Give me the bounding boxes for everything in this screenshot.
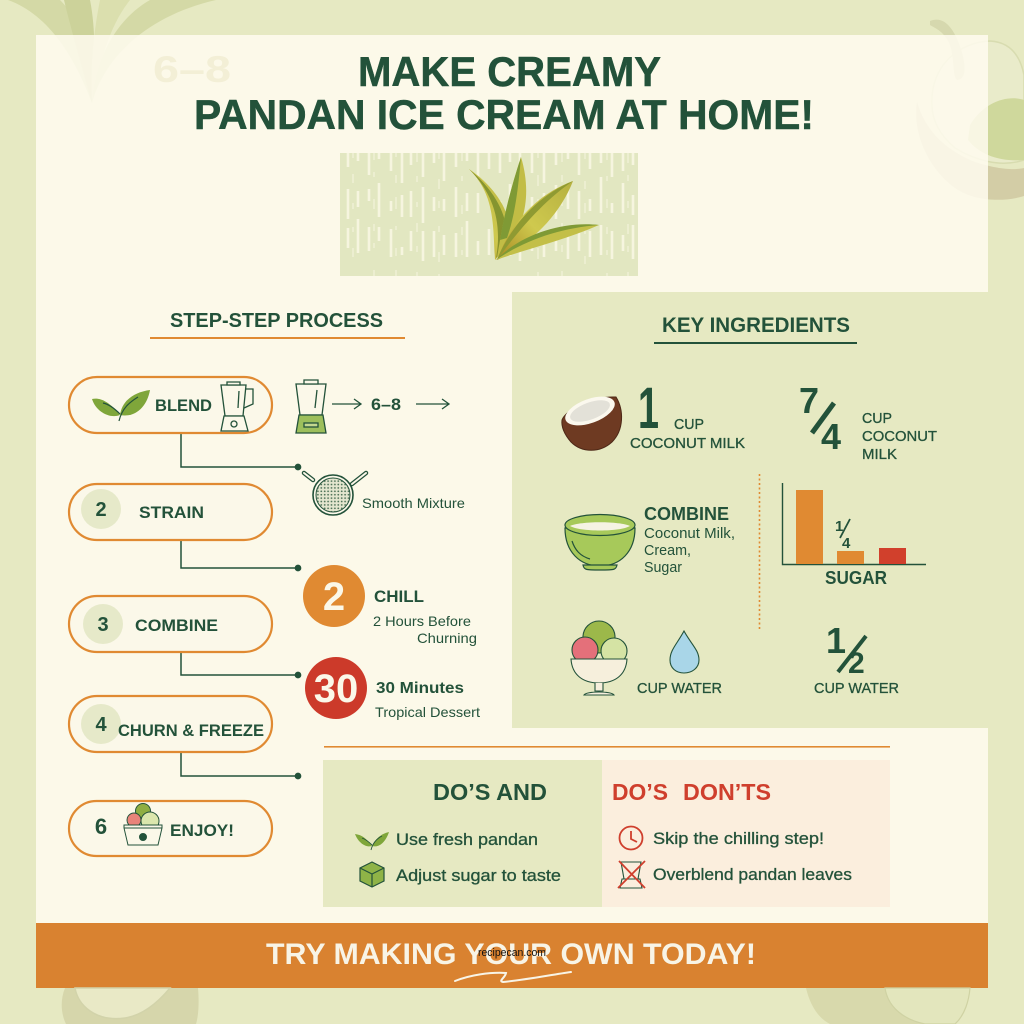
icon: green bowl bbox=[565, 514, 635, 570]
panel: don'ts: Skip the chilling step! bbox=[653, 829, 824, 848]
text: smooth mixture: Smooth Mixture bbox=[362, 495, 465, 511]
call to action banner bbox=[36, 923, 988, 988]
ingredient: 7/4 cup coconut milk: 4 bbox=[821, 416, 841, 457]
watermark: 6-8: 6–8 bbox=[153, 49, 231, 90]
arrow: blend to time bbox=[332, 399, 361, 409]
watermark text: recipecan.com bbox=[478, 947, 546, 959]
icon: water drop bbox=[670, 631, 699, 673]
step 2: strain: STRAIN bbox=[139, 503, 204, 522]
heading: step process: STEP-STEP PROCESS bbox=[170, 310, 383, 332]
bar chart: sugar: 1 bbox=[835, 518, 843, 535]
squiggle underline bbox=[455, 972, 571, 982]
icon: pandan leaves bbox=[469, 157, 599, 260]
panel: do's: DO’S AND bbox=[433, 779, 547, 805]
step 4: churn and freeze bbox=[69, 696, 272, 752]
ingredient: 1/2 cup water: CUP WATER bbox=[814, 680, 899, 697]
ingredient: combine text: Sugar bbox=[644, 560, 682, 576]
arrow: after time bbox=[416, 399, 449, 409]
icon: leaf bbox=[92, 390, 150, 421]
orange rule bbox=[324, 746, 890, 748]
icon: clock bbox=[620, 826, 642, 850]
heading: key ingredients: KEY INGREDIENTS bbox=[662, 314, 850, 337]
title: PANDAN ICE CREAM AT HOME! bbox=[194, 91, 814, 138]
ingredient: 1 cup coconut milk: CUP bbox=[674, 416, 704, 433]
panel: don'ts: DO’S bbox=[612, 779, 668, 805]
icon: strainer bbox=[304, 473, 366, 515]
timer: chill 2 hours: Churning bbox=[417, 630, 477, 646]
step 4: churn and freeze: CHURN & FREEZE bbox=[118, 721, 264, 740]
bar chart: sugar: 4 bbox=[842, 535, 851, 552]
ingredient: 1/2 cup water bbox=[814, 620, 899, 697]
step 3: combine bbox=[69, 596, 272, 652]
ingredient: 1/2 cup water: 2 bbox=[848, 647, 865, 680]
ingredient: 7/4 cup coconut milk: COCONUT bbox=[862, 428, 937, 445]
step 2: strain bbox=[69, 484, 272, 540]
step 3: combine: COMBINE bbox=[135, 616, 218, 635]
icon: ice cream tub bbox=[124, 804, 162, 845]
step 6: enjoy: 6 bbox=[95, 814, 107, 839]
watermark: coconut bottom left bbox=[62, 988, 199, 1024]
panel background: key ingredients bbox=[512, 292, 1024, 728]
panel: do's: Adjust sugar to taste bbox=[396, 866, 561, 885]
step 1: blend bbox=[69, 377, 272, 433]
panel: do's bbox=[323, 760, 602, 907]
ingredient: combine text: COMBINE bbox=[644, 504, 729, 524]
ingredient: 7/4 cup coconut milk bbox=[799, 380, 937, 463]
timer: chill 2 hours: CHILL bbox=[374, 587, 424, 606]
panel: don'ts bbox=[602, 760, 890, 907]
step 1: blend: BLEND bbox=[155, 396, 212, 415]
timer: 30 minutes: 30 Minutes bbox=[376, 680, 464, 697]
icon: sundae bbox=[571, 621, 627, 695]
icon: leaf bbox=[355, 832, 389, 850]
step 3: combine: 3 bbox=[97, 614, 109, 636]
flow connectors bbox=[181, 433, 301, 779]
ingredient: 7/4 cup coconut milk: CUP bbox=[862, 410, 892, 427]
text: cup water: CUP WATER bbox=[637, 680, 722, 697]
ingredient: combine text: Cream, bbox=[644, 543, 691, 559]
panel: do's: Use fresh pandan bbox=[396, 830, 538, 849]
ingredient: 7/4 cup coconut milk: 7 bbox=[799, 380, 819, 421]
title bbox=[194, 48, 814, 138]
panel: don'ts: Overblend pandan leaves bbox=[653, 865, 852, 884]
icon: crossed blender bbox=[618, 861, 645, 888]
ingredient: 1 cup coconut milk: 1 bbox=[638, 376, 659, 441]
ingredient: 1/2 cup water: 1 bbox=[826, 620, 846, 661]
panel: don'ts: DON’TS bbox=[683, 779, 771, 805]
watermark: scoop bottom right bbox=[806, 988, 970, 1024]
timer: chill 2 hours: 2 bbox=[323, 575, 345, 619]
icon: sugar cube bbox=[360, 862, 384, 887]
ingredient: 1 cup coconut milk bbox=[630, 376, 745, 452]
step 2: strain: 2 bbox=[95, 499, 107, 521]
bar chart: sugar: SUGAR bbox=[825, 568, 887, 588]
hero: textured pandan banner bbox=[340, 153, 638, 276]
bar chart: sugar bbox=[782, 483, 926, 588]
timer: chill 2 hours: 2 Hours Before bbox=[373, 613, 471, 629]
icon: blender outline bbox=[221, 382, 253, 431]
ingredient: combine text bbox=[644, 504, 735, 576]
timer: chill 2 hours bbox=[303, 565, 477, 646]
text: 6-8: 6–8 bbox=[371, 395, 401, 414]
watermark: coconut and scoop top right bbox=[916, 20, 1024, 200]
icon: blender green bbox=[296, 380, 326, 433]
timer: 30 minutes bbox=[305, 657, 480, 720]
divider bbox=[758, 474, 760, 630]
timer: 30 minutes: Tropical Dessert bbox=[375, 704, 480, 720]
step 6: enjoy: ENJOY! bbox=[170, 821, 234, 840]
ingredient: 7/4 cup coconut milk: MILK bbox=[862, 446, 897, 463]
call to action banner: TRY MAKING YOUR OWN TODAY! bbox=[266, 938, 756, 971]
step 4: churn and freeze: 4 bbox=[95, 714, 107, 736]
icon: coconut bbox=[561, 391, 622, 450]
ingredient: combine text: Coconut Milk, bbox=[644, 526, 735, 542]
title: MAKE CREAMY bbox=[358, 48, 661, 95]
ingredient: 1 cup coconut milk: COCONUT MILK bbox=[630, 435, 745, 452]
timer: 30 minutes: 30 bbox=[314, 667, 358, 711]
step 6: enjoy bbox=[69, 801, 272, 856]
watermark: pandan leaves top left bbox=[8, 0, 216, 103]
